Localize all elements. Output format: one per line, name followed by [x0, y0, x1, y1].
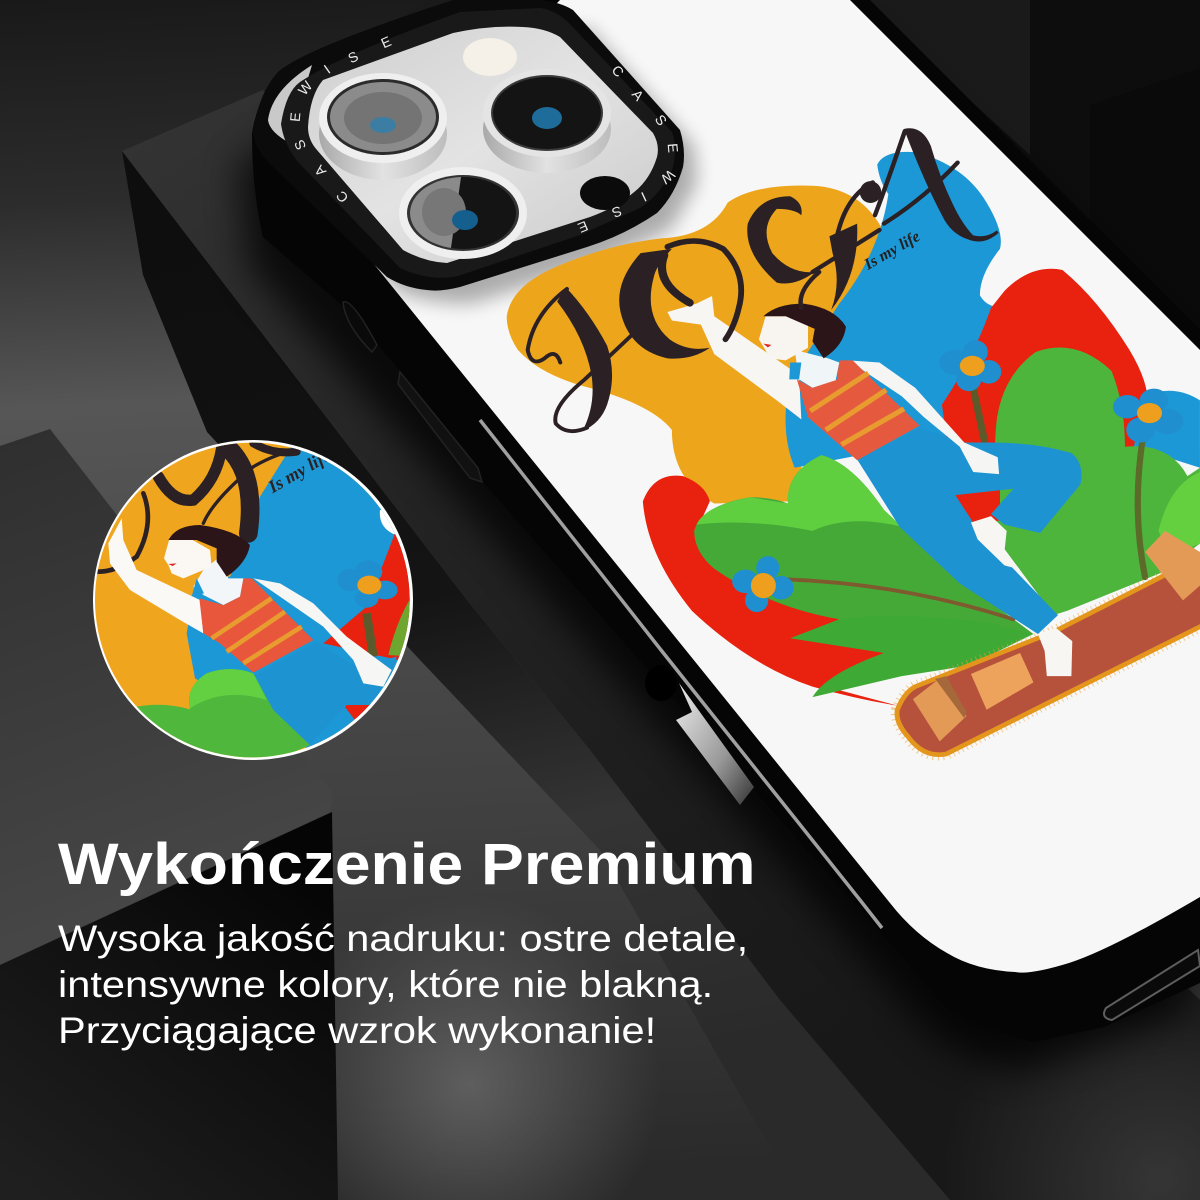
island outer rim	[253, 0, 684, 291]
CASEWISE lettering: I	[321, 61, 333, 77]
standing foot	[1038, 628, 1072, 676]
circle top	[199, 578, 313, 673]
lens bottom	[399, 167, 527, 259]
central block side face	[122, 151, 950, 1200]
woman figure	[667, 296, 1081, 676]
red patch under knee	[957, 490, 1000, 522]
description text: intensywne kolory, które nie blakną.	[58, 964, 713, 1005]
green lower leaf	[790, 616, 1033, 697]
CASEWISE lettering: E	[378, 33, 394, 51]
blue collar patch	[789, 363, 801, 379]
top stripes	[810, 373, 904, 445]
circle neck	[193, 557, 243, 605]
circle raised arm	[108, 518, 203, 633]
CASEWISE lettering: S	[345, 48, 361, 66]
circle green right leaf	[388, 593, 413, 657]
wooden blocks	[913, 531, 1200, 741]
letter J	[528, 288, 634, 431]
circle tagline: Is my life	[264, 445, 334, 497]
yoga artwork on phone	[507, 128, 1200, 755]
flower right	[1113, 389, 1183, 443]
flash	[463, 38, 517, 76]
top	[797, 360, 920, 460]
red blob right	[942, 268, 1146, 447]
green left bush	[694, 455, 1033, 634]
red blob left	[643, 476, 897, 706]
CASEWISE lettering: S	[610, 203, 624, 221]
description text	[58, 918, 748, 1051]
description text: Wysoka jakość nadruku: ostre detale,	[58, 918, 748, 959]
circle flower	[337, 560, 398, 657]
CASEWISE lettering: S	[652, 112, 670, 128]
letter G	[747, 181, 881, 310]
lower right floor glow	[940, 960, 1200, 1200]
CASEWISE lettering: I	[639, 189, 649, 205]
orange blob	[507, 186, 884, 504]
CASEWISE lettering	[287, 33, 681, 236]
white back of phone	[340, 0, 1200, 973]
upper right dark blocks	[850, 0, 1200, 360]
CASEWISE lettering: S	[291, 137, 309, 153]
letter A	[875, 128, 999, 242]
circle trousers	[255, 642, 397, 745]
flower middle	[939, 340, 1001, 391]
circle blue background	[187, 443, 430, 750]
JOGA lettering	[528, 128, 999, 431]
camera island	[253, 0, 684, 291]
raised arm	[667, 296, 801, 419]
tagline on artwork: Is my life	[861, 228, 923, 274]
circle orange background	[80, 430, 430, 770]
circle lowered arm	[253, 578, 392, 687]
phone case body	[252, 0, 1200, 1042]
camera island shadow on back	[376, 20, 706, 314]
trousers	[857, 428, 1081, 634]
circle hair	[168, 525, 250, 577]
microphone hole	[580, 176, 630, 210]
CASEWISE lettering: W	[657, 167, 678, 188]
right blue leaf	[1134, 391, 1200, 468]
blue blob	[786, 152, 1004, 468]
bent foot	[971, 516, 1020, 570]
description text: Przyciągające wzrok wykonanie!	[58, 1010, 656, 1051]
circle blue patch	[192, 578, 204, 597]
side switch	[343, 302, 377, 352]
lips	[763, 344, 771, 347]
CASEWISE lettering: E	[287, 112, 303, 122]
camera glass	[308, 27, 658, 263]
circle lips	[168, 563, 177, 566]
hair	[763, 304, 846, 358]
power button recess	[645, 665, 677, 701]
circle top stripes	[212, 598, 302, 663]
neck and shoulder	[795, 350, 839, 388]
phone shadow	[238, 30, 1186, 1072]
black bezel band	[281, 8, 675, 278]
circle face	[164, 537, 212, 578]
CASEWISE lettering: E	[576, 218, 590, 236]
green bush highlight	[696, 455, 902, 531]
green right bush	[991, 348, 1200, 615]
flower left	[732, 556, 794, 612]
yoga mat	[897, 556, 1200, 755]
silver crescent on rim	[268, 65, 312, 148]
CASEWISE lettering: C	[609, 62, 627, 80]
circle red lower patch	[343, 703, 373, 720]
circle green bushes	[137, 669, 310, 770]
charging port	[1104, 950, 1200, 1020]
circle lettering	[98, 443, 297, 572]
power button	[676, 683, 754, 805]
circle bush highlight	[189, 669, 267, 708]
left block front face	[0, 812, 338, 1200]
heading: Wykończenie Premium	[58, 832, 756, 897]
volume button	[398, 372, 482, 482]
CASEWISE lettering: E	[665, 143, 681, 153]
letter O	[619, 241, 741, 359]
stems	[786, 388, 1145, 619]
CASEWISE lettering: A	[310, 162, 329, 180]
CASEWISE lettering: A	[629, 86, 648, 104]
background glow	[240, 880, 720, 1200]
lowered arm	[848, 360, 999, 474]
silver rim highlight	[480, 420, 882, 928]
left block top face	[0, 429, 333, 965]
zoom circle detail	[80, 430, 430, 770]
phone	[252, 0, 1200, 1042]
CASEWISE lettering: C	[333, 188, 351, 206]
green far right leaf	[1158, 472, 1200, 547]
CASEWISE lettering: W	[295, 77, 316, 98]
lens top left	[319, 73, 447, 180]
circle red blob	[323, 533, 417, 663]
face	[759, 316, 808, 360]
lens top right	[483, 69, 611, 173]
circle white blob	[380, 510, 413, 537]
